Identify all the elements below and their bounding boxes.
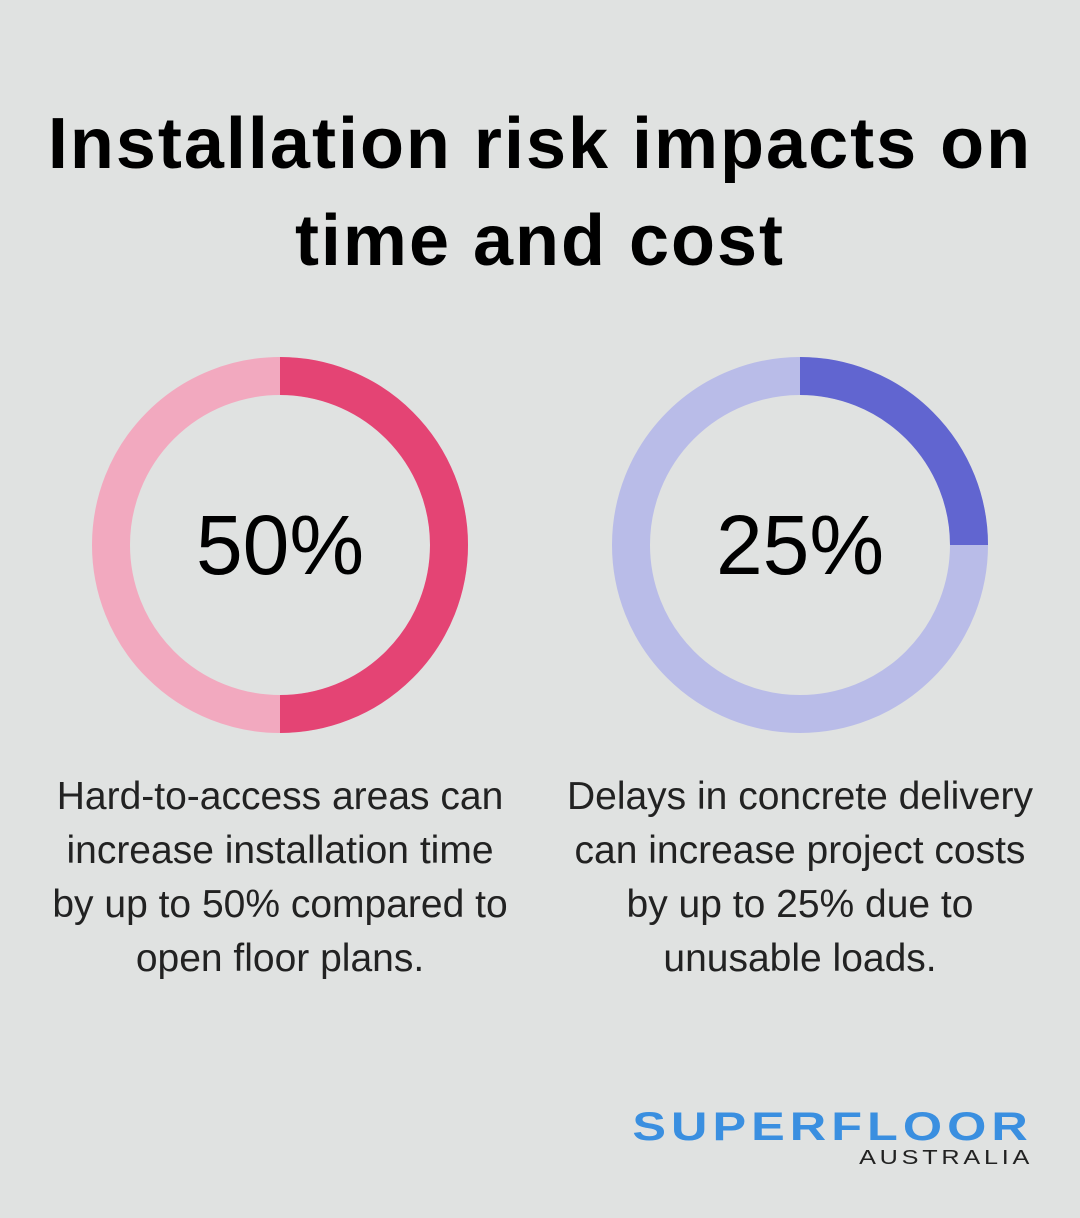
title <box>48 104 1032 281</box>
percent label 50%: 50% <box>196 498 364 592</box>
text: left description: by up to 50% compared to <box>52 883 508 926</box>
text: left description: Hard-to-access areas can <box>57 775 503 818</box>
logo: AUSTRALIA <box>859 1147 1033 1169</box>
logo: SUPERFLOOR <box>633 1105 1033 1149</box>
donut: 50% <box>92 357 468 733</box>
text: right description <box>567 775 1033 980</box>
text: left description <box>52 775 508 980</box>
text: right description: unusable loads. <box>663 937 937 980</box>
text: right description: can increase project costs <box>575 829 1025 872</box>
text: right description: Delays in concrete delivery <box>567 775 1033 818</box>
logo <box>633 1105 1033 1169</box>
percent label 25%: 25% <box>716 498 884 592</box>
text: left description: open floor plans. <box>136 937 424 980</box>
title: Installation risk impacts on <box>48 104 1032 184</box>
title: time and cost <box>295 201 785 281</box>
text: left description: increase installation time <box>66 829 494 872</box>
donut: 25% <box>612 357 988 733</box>
text: right description: by up to 25% due to <box>627 883 973 926</box>
